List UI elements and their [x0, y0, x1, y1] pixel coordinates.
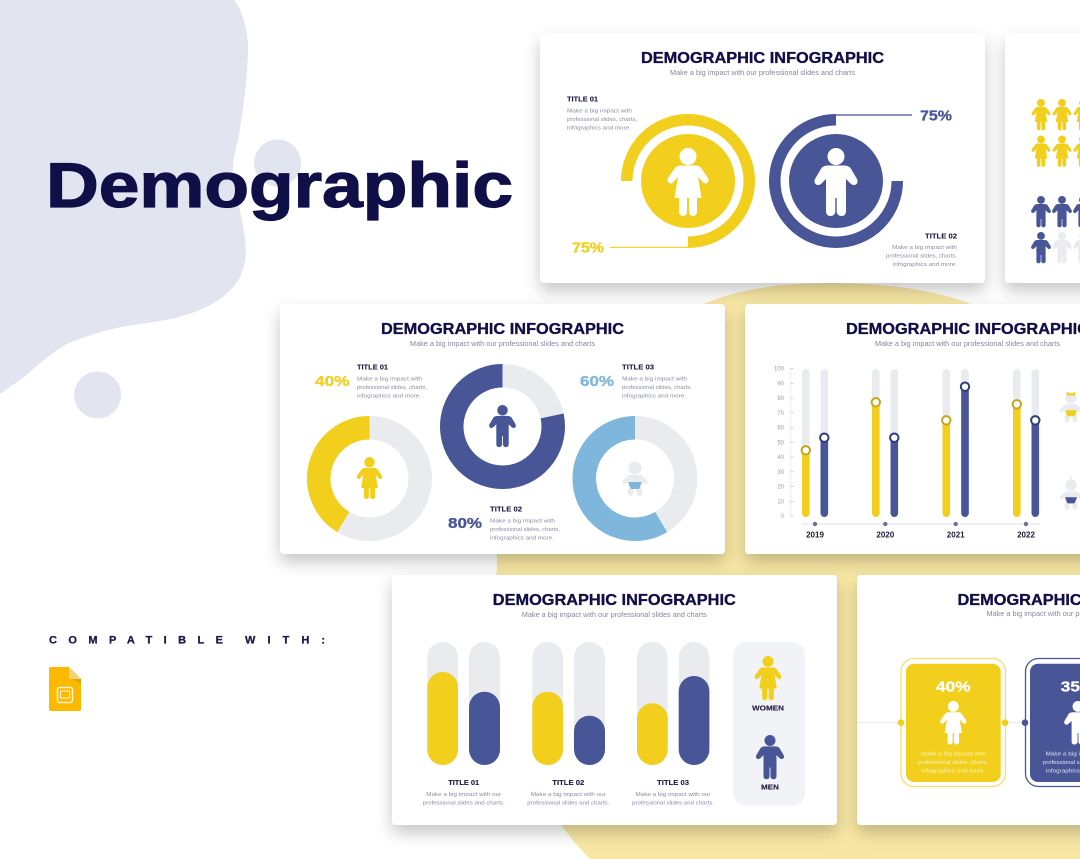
text block: title 01: [423, 778, 505, 806]
text block: title 01: infographics and more.: [567, 126, 631, 132]
text block: title 02: [886, 232, 957, 268]
y axis with ticks: 20: [777, 484, 785, 490]
yellow percentage: 75%: [572, 240, 604, 256]
text block: title 03: TITLE 03: [622, 362, 654, 372]
text block: title 03: [622, 362, 692, 400]
heading: DEMOGRAPHIC INFOGRAPHIC: [641, 50, 884, 67]
icon: woman yellow: [357, 457, 382, 499]
legend label: women: WOMEN: [752, 704, 784, 712]
panel: cards slide: [857, 575, 1080, 825]
card text: infographics and more.: [921, 768, 986, 774]
text block: title 02: Make a big impact with our: [531, 792, 606, 798]
x axis with years: 2021: [947, 530, 965, 540]
gauge: blue 75 percent: [775, 115, 912, 242]
y axis with ticks: 50: [777, 440, 785, 446]
text block: title 01: professional slides, charts,: [357, 385, 427, 391]
capsule tracks: [427, 642, 709, 765]
card text: professional slides, charts,: [918, 760, 989, 766]
subheading: Make a big impact with our professional slides and charts: [670, 68, 855, 77]
text block: title 03: TITLE 03: [657, 778, 689, 787]
subheading: Make a big impact with our professional slides and charts: [522, 610, 707, 619]
x axis with years: 2022: [1017, 530, 1035, 540]
text block: title 03: professional slides, charts,: [622, 385, 692, 391]
y axis with ticks: 40: [777, 455, 785, 461]
heading: DEMOGRAPHIC INFOGRAPHIC: [493, 592, 736, 609]
callout: 40 percent: 40%: [315, 373, 350, 390]
text block: title 02: professional slides and charts.: [527, 800, 610, 806]
heading: DEMOGRAPHIC INFOGRAPHIC: [381, 321, 624, 338]
bars: yellow series: [802, 402, 1021, 517]
y axis with ticks: [774, 366, 794, 520]
icon: baby girl: [1060, 392, 1080, 422]
y axis with ticks: 90: [777, 381, 785, 387]
y axis with ticks: 30: [777, 470, 785, 476]
text block: title 03: infographics and more.: [622, 394, 686, 400]
text block: title 03: Make a big impact with: [622, 376, 687, 382]
panel: vertical bar chart slide: [745, 304, 1080, 554]
text block: title 02: Make a big impact with: [490, 518, 555, 524]
icon: woman white: [667, 148, 709, 216]
card text: [918, 752, 989, 774]
blue percentage: 75%: [920, 108, 952, 124]
icon: slides document: [49, 667, 81, 711]
donut: 60 percent light blue: [584, 428, 686, 529]
icon: woman white: [940, 701, 966, 745]
legend label: men: MEN: [761, 782, 779, 792]
text block: title 02: [527, 778, 610, 806]
icon: man blue: [756, 735, 784, 779]
text block: title 02: TITLE 02: [925, 232, 957, 240]
donut: 40 percent yellow: [319, 428, 420, 529]
value markers: yellow: [802, 398, 1021, 454]
icon: man blue: [489, 405, 516, 447]
capsule values: yellow: [427, 672, 668, 765]
text block: title 01: [567, 94, 637, 132]
gauge: yellow 75 percent: [610, 120, 749, 247]
x axis with years: 2019: [806, 530, 824, 540]
text block: title 02: Make a big impact with: [892, 245, 957, 251]
text block: title 01: TITLE 01: [357, 362, 389, 372]
subheading: Make a big impact with our professional slides and charts: [875, 339, 1060, 348]
y axis with ticks: 10: [777, 499, 785, 505]
capsule values: blue: [469, 676, 709, 765]
text block: title 03: [632, 778, 714, 806]
y axis with ticks: 80: [777, 396, 785, 402]
background: small circle lower left: [74, 372, 121, 418]
callout: 60 percent: 60%: [580, 373, 614, 390]
background: small circle behind title: [254, 140, 301, 186]
text block: title 03: professional slides and charts.: [632, 800, 714, 806]
bars: tracks: [802, 369, 1039, 517]
text block: title 02: TITLE 02: [490, 504, 522, 514]
text block: title 01: Make a big impact with: [357, 376, 422, 382]
icon: woman yellow: [755, 656, 781, 700]
legend panel: [733, 642, 805, 806]
text block: title 02: TITLE 02: [552, 778, 584, 787]
text block: title 01: TITLE 01: [448, 778, 480, 787]
x axis with years: 2020: [876, 530, 895, 540]
pictogram rows: women: [1032, 99, 1080, 167]
text block: title 01: professional slides, charts,: [567, 117, 637, 123]
panel: top slide with circular gauges: [540, 33, 985, 283]
card text: Make a big impact with: [921, 752, 986, 758]
x axis with years: [802, 522, 1040, 540]
card: yellow 40 percent: [898, 658, 1008, 786]
text block: title 02: infographics and more.: [893, 262, 957, 268]
donut: 80 percent blue: [452, 376, 553, 477]
compatible with label: WITH:: [245, 634, 325, 646]
pictogram rows: men: [1031, 196, 1080, 263]
connector line: [857, 722, 1030, 724]
y axis with ticks: 0: [781, 514, 785, 520]
text block: title 01: Make a big impact with: [567, 108, 632, 114]
text block: title 02: professional slides, charts,: [490, 527, 560, 533]
panel: top right slide with pictograms: [1005, 33, 1080, 283]
callout: 80 percent: 80%: [448, 515, 482, 532]
text block: title 01: professional slides and charts.: [423, 800, 505, 806]
icon: baby boy: [1060, 476, 1080, 509]
text block: title 01: infographics and more.: [357, 394, 421, 400]
text block: title 03: Make a big impact with our: [636, 792, 711, 798]
card: blue 35 percent: [1022, 658, 1080, 786]
y axis with ticks: 60: [777, 426, 785, 432]
compatible with label: [49, 634, 325, 646]
text block: title 02: professional slides, charts,: [886, 254, 957, 260]
y axis with ticks: 70: [777, 411, 785, 417]
compatible with label: COMPATIBLE: [49, 634, 223, 646]
subheading: Make a big impact with our professional slides and charts: [410, 339, 595, 348]
panel: capsule bars slide: [392, 575, 837, 825]
icon: man white: [814, 148, 858, 216]
background: pale yellow blob: [496, 283, 1080, 859]
icon: baby: [622, 462, 648, 496]
bars: blue series: [820, 387, 1039, 517]
card text: [1043, 752, 1080, 774]
panel: donut charts slide: [280, 304, 725, 554]
text block: title 02: [490, 504, 560, 542]
icon: man white: [1064, 701, 1080, 745]
text block: title 01: [357, 362, 427, 400]
background: lavender blob: [0, 0, 248, 394]
value markers: blue: [820, 382, 1040, 442]
text block: title 01: Make a big impact with our: [426, 792, 501, 798]
main title: Demographic: [46, 151, 513, 221]
card percentage: 40%: [936, 678, 971, 696]
text block: title 02: infographics and more.: [490, 536, 554, 542]
y axis with ticks: 100: [774, 366, 785, 372]
heading: DEMOGRAPHIC INFOGRAPHIC: [846, 321, 1080, 338]
text block: title 01: TITLE 01: [567, 94, 599, 104]
